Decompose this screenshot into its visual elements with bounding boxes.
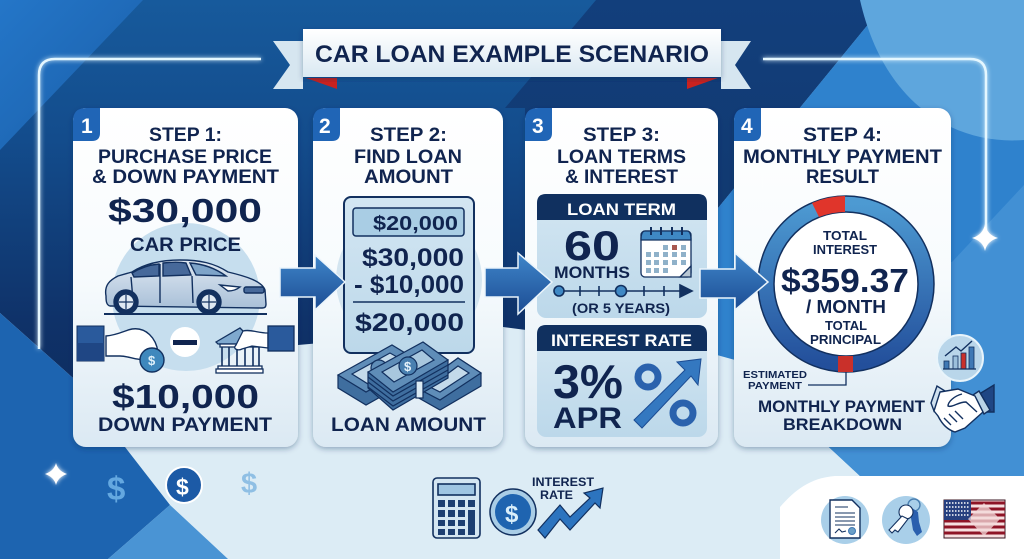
APR label: APR (553, 402, 622, 435)
glowing frame line left (39, 59, 261, 349)
heading (92, 125, 279, 188)
ribbon fold right (687, 78, 718, 89)
interest rate header text: INTEREST RATE (551, 331, 692, 350)
donut chart (758, 196, 934, 372)
interest rate label: INTEREST (532, 475, 595, 489)
icon: calculator (433, 478, 480, 538)
panel: step 4 (734, 108, 951, 447)
down payment operand: - $10,000 (354, 271, 464, 299)
icon: faint dollar sign: $ (241, 468, 257, 500)
arrow: step 2 to step 3 (485, 253, 552, 314)
monthly payment value: $359.37 (781, 262, 909, 299)
down payment label: DOWN PAYMENT (98, 415, 272, 436)
interest rate label (532, 475, 595, 502)
heading: STEP 1: (149, 125, 222, 146)
icon: minus sign (170, 327, 200, 357)
breakdown caption (758, 397, 926, 434)
ribbon tail right (721, 41, 751, 89)
3% value: 3% (553, 355, 623, 408)
icon: percent with arrow (634, 359, 701, 428)
estimated payment callout: PAYMENT (748, 380, 803, 392)
icon: car (104, 260, 267, 314)
heading: STEP 2: (370, 125, 447, 146)
icon: sparkle left (45, 463, 67, 485)
ribbon tail left (273, 41, 303, 89)
icon: american flag (944, 500, 1005, 538)
panel card (734, 108, 951, 447)
display field (353, 208, 464, 236)
months label: MONTHS (554, 263, 630, 282)
interest rate card (537, 325, 707, 437)
heading: & DOWN PAYMENT (92, 167, 279, 188)
interest rate label: RATE (540, 488, 573, 502)
step badge 3 (525, 108, 552, 141)
icon: calendar (641, 227, 691, 277)
car price value: $30,000 (108, 192, 262, 229)
loan term header text: LOAN TERM (567, 200, 676, 219)
step badge 2 (313, 108, 340, 141)
result: $20,000 (355, 309, 464, 337)
panel card (313, 108, 503, 447)
heading: RESULT (806, 167, 879, 188)
step badge 1 (73, 108, 100, 141)
ribbon body (303, 29, 721, 77)
red segment: interest (812, 196, 845, 217)
loan term header (537, 194, 707, 220)
breakdown caption: MONTHLY PAYMENT (758, 397, 926, 416)
estimated payment callout: ESTIMATED (743, 369, 807, 381)
panel: step 3 (525, 108, 718, 447)
icon: hand with coin: $ (148, 353, 156, 368)
years note: (OR 5 YEARS) (572, 300, 670, 316)
loan amount label: LOAN AMOUNT (331, 415, 486, 436)
loan term card (537, 194, 707, 318)
step badge 4: 4 (741, 115, 753, 138)
icon: keys (882, 496, 930, 544)
red segment: estimated payment (838, 356, 853, 372)
backdrop circle (112, 223, 260, 371)
interest rate header (537, 325, 707, 351)
total principal label: PRINCIPAL (810, 332, 881, 347)
step badge 2: 2 (319, 115, 331, 138)
icon: money stacks (338, 342, 481, 410)
heading: STEP 4: (803, 125, 882, 146)
icon: money stacks: $ (404, 359, 412, 374)
heading: PURCHASE PRICE (98, 147, 272, 168)
heading (354, 125, 462, 188)
timeline (554, 285, 692, 297)
price operand: $30,000 (362, 244, 464, 272)
total interest label: TOTAL (823, 228, 867, 243)
breakdown caption: BREAKDOWN (783, 415, 902, 434)
title text: CAR LOAN EXAMPLE SCENARIO (315, 41, 709, 68)
icon: dollar coin bottom: $ (505, 501, 519, 528)
heading (557, 125, 686, 188)
panel card (525, 108, 718, 447)
panel: step 1 (73, 108, 298, 447)
icon: dollar sign left: $ (107, 470, 125, 507)
total interest label: INTEREST (813, 242, 877, 257)
backdrop circle (336, 207, 482, 353)
60 value: 60 (564, 222, 620, 269)
per month label: / MONTH (806, 297, 886, 317)
heading (743, 125, 942, 188)
panel: step 2 (313, 108, 503, 447)
icon: document (821, 496, 869, 544)
title banner (273, 29, 751, 89)
icon: rising interest arrow (538, 488, 603, 538)
total principal label (810, 318, 881, 347)
heading: AMOUNT (364, 167, 453, 188)
total interest label (813, 228, 877, 257)
heading: & INTEREST (565, 167, 678, 188)
heading: FIND LOAN (354, 147, 462, 168)
ribbon fold left (306, 78, 337, 89)
heading: MONTHLY PAYMENT (743, 147, 942, 168)
total principal label: TOTAL (825, 318, 867, 333)
icon: dollar coin bottom (490, 489, 536, 535)
heading: STEP 3: (583, 125, 660, 146)
icon: sparkle right (972, 224, 998, 251)
car price label: CAR PRICE (130, 235, 241, 256)
heading: LOAN TERMS (557, 147, 686, 168)
estimated payment callout (743, 369, 846, 392)
down payment value: $10,000 (112, 378, 259, 415)
display value: $20,000 (373, 213, 458, 235)
icon: dollar coin (166, 467, 202, 503)
step badge 1: 1 (81, 115, 93, 138)
calculation box (344, 197, 474, 353)
icon: bank with hand (216, 326, 294, 373)
panel card (73, 108, 298, 447)
step badge 3: 3 (532, 115, 544, 138)
glowing frame line right (763, 59, 986, 232)
icon: growth chart badge (937, 335, 983, 381)
arrow: step 1 to step 2 (280, 255, 345, 310)
step badge 4 (734, 108, 761, 141)
arrow: step 3 to step 4 (700, 253, 768, 310)
icon: hand with coin (77, 326, 164, 372)
icon: handshake (931, 385, 994, 432)
icon: dollar coin: $ (176, 474, 189, 500)
